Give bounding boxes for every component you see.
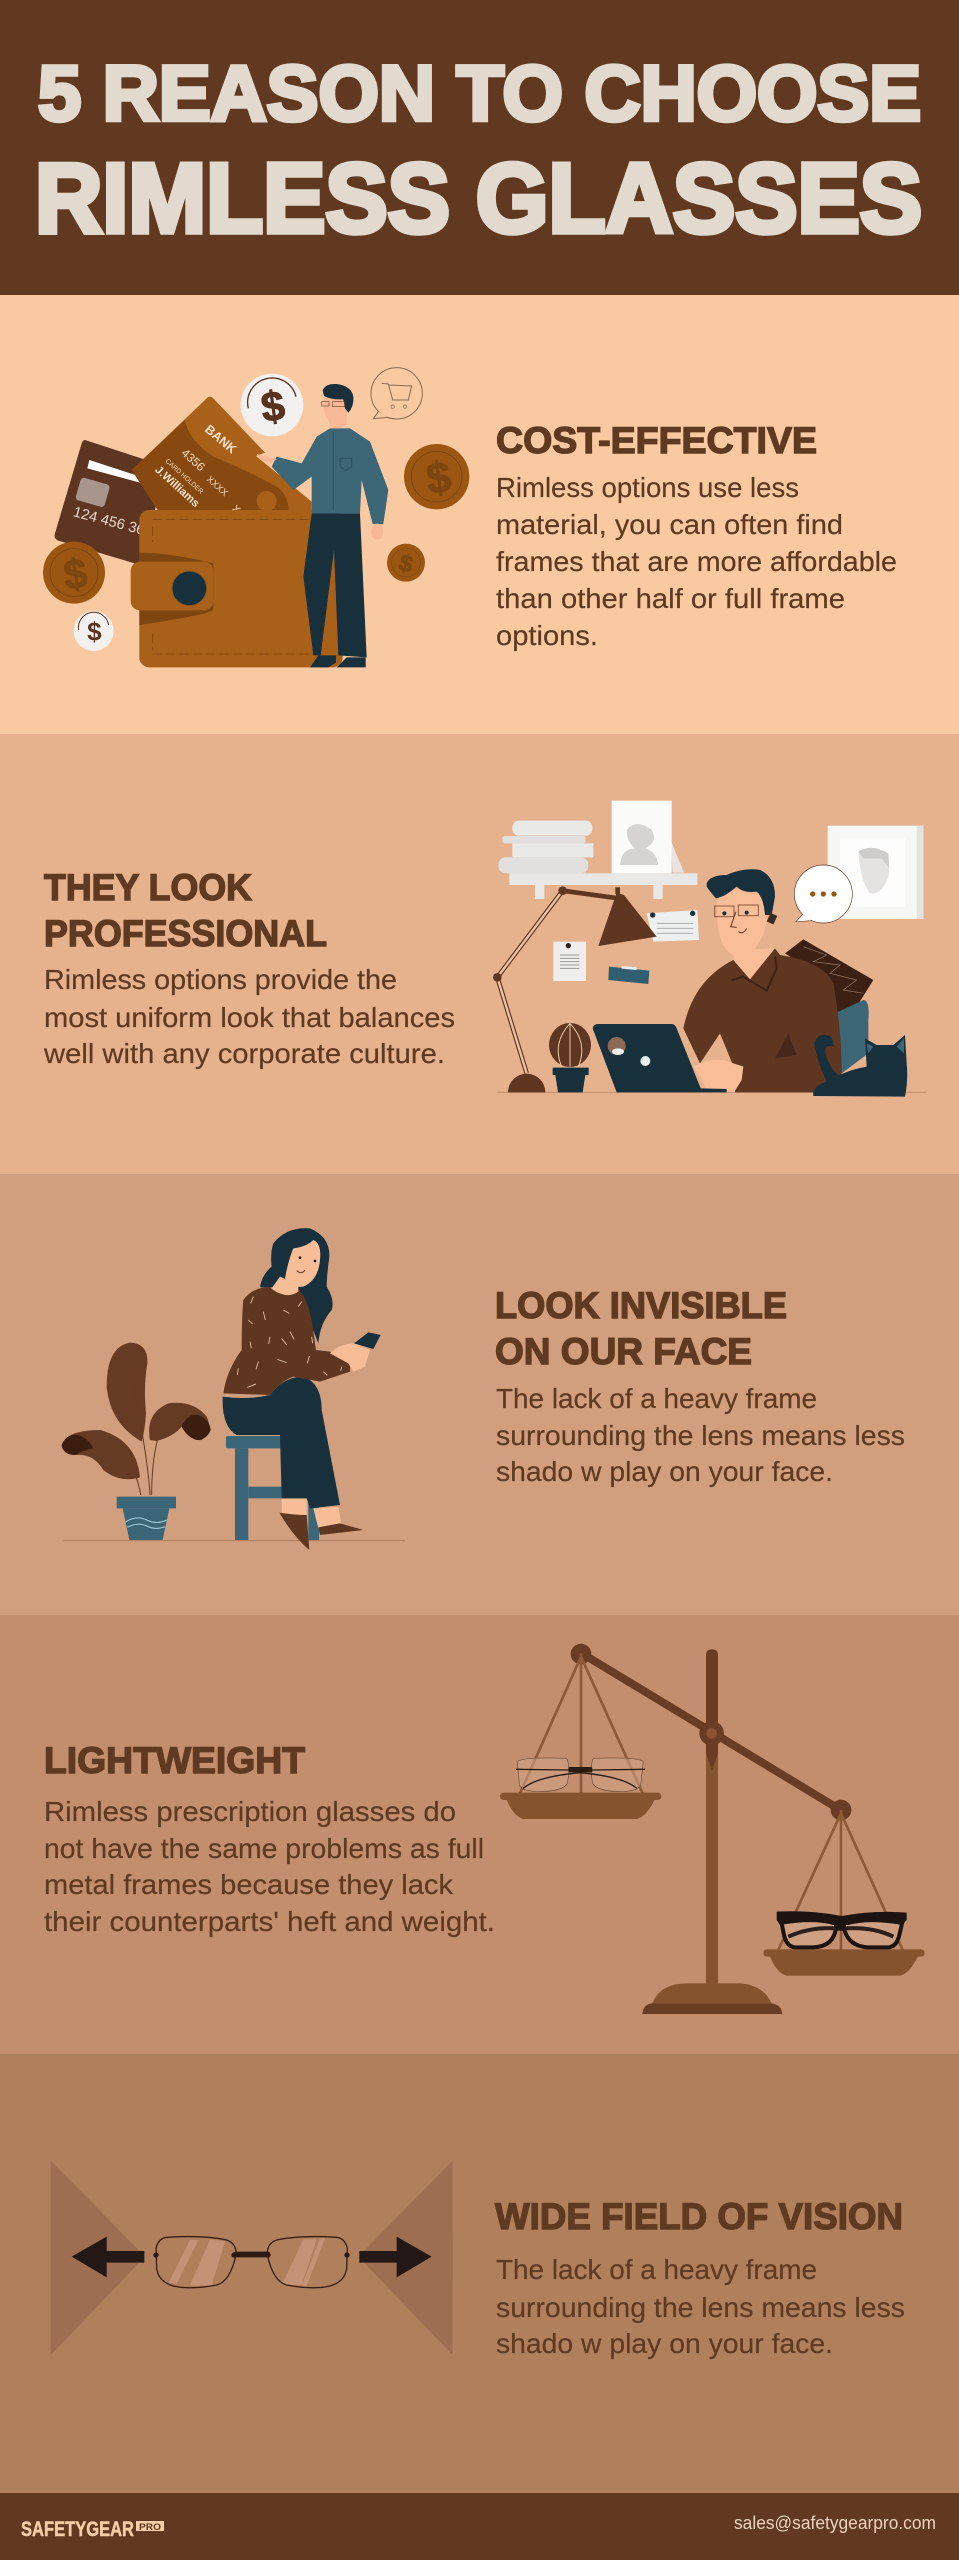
body text: lightweight (44, 1796, 495, 1937)
body text: wide field of vision: surrounding the lens means less (496, 2292, 905, 2323)
body text: cost-effective: options. (496, 620, 598, 651)
heading: cost-effective: COST-EFFECTIVE (496, 419, 817, 461)
title line one: 5 REASON TO CHOOSE (38, 49, 921, 137)
body text: look invisible on our face: shado w play on your face. (496, 1456, 833, 1487)
heading: wide field of vision: WIDE FIELD OF VISION (495, 2195, 903, 2237)
illustration: man with wallet, cards and coins: $ (423, 453, 454, 504)
title line two: RIMLESS GLASSES (35, 143, 922, 253)
body text: look invisible on our face: surrounding the lens means less (496, 1420, 905, 1451)
illustration: man with wallet, cards and coins: 124 456 36 (71, 504, 146, 539)
footer logo: PRO (139, 2522, 161, 2532)
illustration: man with wallet, cards and coins: $ (396, 549, 416, 579)
body text: wide field of vision: shado w play on your face. (496, 2328, 833, 2359)
illustration: woman on stool with phone and plant (62, 1228, 405, 1550)
heading: they look professional: THEY LOOK (44, 866, 252, 908)
body text: they look professional (43, 964, 455, 1069)
illustration: man with wallet, cards and coins (43, 368, 469, 667)
body text: lightweight: not have the same problems as full (44, 1833, 484, 1864)
body text: lightweight: Rimless prescription glasses do (44, 1796, 456, 1827)
body text: cost-effective: frames that are more affordable (496, 546, 897, 577)
heading: they look professional: PROFESSIONAL (44, 912, 327, 954)
illustration: man with wallet, cards and coins: BANK (202, 422, 240, 457)
body text: they look professional: most uniform look that balances (44, 1002, 455, 1033)
body text: lightweight: metal frames because they lack (44, 1869, 454, 1900)
illustration: man with wallet, cards and coins: $ (87, 617, 102, 647)
body text: look invisible on our face: The lack of a heavy frame (496, 1383, 817, 1414)
body text: lightweight: their counterparts' heft and weight. (44, 1906, 495, 1937)
panel: cost-effective (0, 295, 959, 734)
illustration: man with wallet, cards and coins: $ (61, 549, 90, 599)
heading: look invisible on our face: LOOK INVISIBLE (495, 1284, 787, 1326)
body text: wide field of vision: The lack of a heavy frame (496, 2254, 817, 2285)
panel: lightweight (0, 1615, 959, 2054)
illustration: man at desk with laptop, lamp and cat (493, 801, 927, 1097)
body text: cost-effective: than other half or full frame (496, 583, 845, 614)
panel: wide field of vision (0, 2054, 959, 2493)
illustration: man with wallet, cards and coins: XXXX (205, 474, 230, 499)
footer email: sales@safetygearpro.com (734, 2513, 936, 2533)
illustration: man with wallet, cards and coins: 4356 (179, 446, 208, 474)
body text: look invisible on our face (496, 1383, 905, 1487)
illustration: man with wallet, cards and coins: CARD HOLDER (164, 458, 204, 496)
footer logo: SAFETYGEAR (21, 2518, 134, 2541)
body text: wide field of vision (496, 2254, 905, 2359)
heading: lightweight: LIGHTWEIGHT (44, 1739, 305, 1781)
illustration: man with wallet, cards and coins: $ (258, 381, 288, 431)
body text: cost-effective: Rimless options use less (496, 472, 799, 503)
heading: look invisible on our face: ON OUR FACE (495, 1330, 752, 1372)
body text: they look professional: Rimless options provide the (44, 964, 397, 995)
illustration: man with wallet, cards and coins: X (230, 503, 242, 516)
illustration: glasses with outward arrows (51, 2161, 453, 2355)
body text: cost-effective (496, 472, 897, 651)
body text: they look professional: well with any corporate culture. (43, 1038, 445, 1069)
heading: they look professional (44, 866, 327, 954)
illustration: balance scale with rimless and full-frame glasses (500, 1644, 925, 2014)
header band with title (0, 0, 959, 295)
heading: look invisible on our face (495, 1284, 787, 1372)
panel: look invisible on our face (0, 1174, 959, 1615)
illustration: man with wallet, cards and coins: J.Williams (152, 464, 201, 510)
panel: they look professional (0, 734, 959, 1174)
body text: cost-effective: material, you can often find (496, 509, 843, 540)
footer band (0, 2493, 959, 2560)
